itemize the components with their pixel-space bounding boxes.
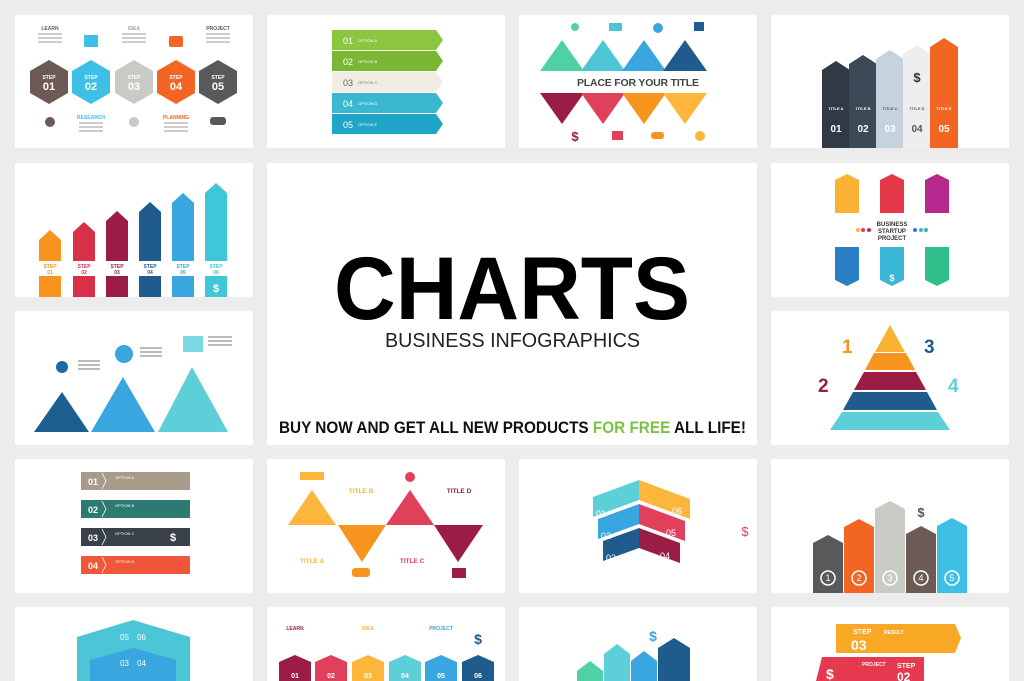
heading: CHARTS: CHARTS	[334, 238, 690, 338]
panel: option stripes: 01	[343, 36, 353, 46]
panel: title columns 01-05: $	[913, 70, 921, 85]
panel: option stripes: OPTION A	[358, 38, 377, 43]
panel: numbered arrow columns: $	[917, 505, 925, 520]
panel: bottom step hexagons: 03	[364, 673, 372, 680]
panel: title columns 01-05: TITLE C	[882, 106, 898, 111]
panel: title columns 01-05: TITLE E	[937, 106, 952, 111]
panel: rising step arrows: STEP	[209, 264, 223, 270]
panel: hexagon steps: 02	[85, 81, 97, 93]
panel: chevrons 01-06: 03	[606, 553, 616, 563]
panel: business startup project: STARTUP	[878, 229, 906, 235]
panel: bottom house shape: 04	[137, 659, 146, 668]
panel: rising step arrows: STEP	[43, 264, 57, 270]
panel: business startup project: BUSINESS	[877, 222, 907, 228]
panel: hexagon steps: STEP	[127, 75, 141, 81]
panel: bottom house shape: 06	[137, 633, 146, 642]
panel: rising step arrows: 03	[114, 270, 120, 276]
call to action: BUY NOW AND GET ALL NEW PRODUCTS FOR FREE ALL LIFE!	[279, 419, 746, 437]
panel: title columns 01-05: 05	[938, 124, 950, 135]
panel: bottom step hexagons	[267, 607, 505, 681]
panel: title columns 01-05: 04	[911, 124, 923, 135]
title text: PLACE FOR YOUR TITLE	[577, 77, 699, 89]
panel: hexagon steps: 01	[43, 81, 55, 93]
panel: chevrons 01-06: 05	[666, 528, 676, 538]
panel: numbered arrow columns: 1	[825, 573, 831, 583]
panel: pyramid: 1	[842, 337, 853, 358]
panel: bottom arrows: $	[649, 628, 657, 644]
panel: bottom house shape: 03	[120, 659, 129, 668]
panel: hexagon steps: PROJECT	[206, 26, 230, 32]
panel: zigzag triangles: TITLE C	[400, 558, 425, 565]
panel: option stripes: 03	[343, 78, 353, 88]
panel: option ribbons: OPTION B	[115, 503, 134, 508]
panel: hexagon steps: RESEARCH	[77, 115, 105, 121]
panel: zigzag triangles: TITLE A	[300, 558, 324, 565]
panel: numbered arrow columns	[771, 459, 1009, 593]
panel: bottom step ribbons: STEP	[853, 629, 872, 636]
panel: numbered arrow columns: 4	[918, 573, 924, 583]
panel: bottom step ribbons: PROJECT	[862, 662, 886, 668]
panel: chevrons 01-06: 01	[596, 509, 606, 519]
panel: option stripes: OPTION E	[358, 122, 377, 127]
panel: hexagon steps: STEP	[211, 75, 225, 81]
panel: rising step arrows: 05	[180, 270, 186, 276]
panel: pyramid: 2	[818, 376, 829, 397]
panel: bottom step hexagons: 02	[327, 673, 335, 680]
panel: option ribbons: OPTION C	[115, 531, 134, 536]
panel: chevrons 01-06: 02	[601, 531, 611, 541]
panel: rising step arrows: STEP	[143, 264, 157, 270]
panel: place for your title triangles: $	[571, 129, 579, 144]
panel: numbered arrow columns: 5	[949, 573, 955, 583]
panel: zigzag triangles	[267, 459, 505, 593]
panel: business startup project	[771, 163, 1009, 297]
panel: pyramid: 3	[924, 337, 935, 358]
panel: title columns 01-05: TITLE B	[855, 106, 871, 111]
panel: option ribbons: 02	[88, 505, 98, 515]
panel: bottom step ribbons: 03	[851, 637, 867, 653]
panel: rising step arrows: 01	[47, 270, 53, 276]
panel: title columns 01-05: 01	[830, 124, 842, 135]
panel: option stripes: OPTION C	[358, 80, 377, 85]
subheading: BUSINESS INFOGRAPHICS	[385, 330, 640, 352]
panel: hexagon steps: STEP	[42, 75, 56, 81]
panel: center title	[267, 163, 757, 445]
panel: rising step arrows	[15, 163, 253, 297]
panel: bottom step ribbons	[771, 607, 1009, 681]
panel: option stripes	[267, 15, 505, 148]
panel: pyramid	[771, 311, 1009, 445]
panel: rising step arrows: STEP	[176, 264, 190, 270]
panel: hexagon steps	[15, 15, 253, 148]
panel: rising step arrows: 02	[81, 270, 87, 276]
panel: chevrons 01-06: $	[741, 524, 749, 539]
panel: hexagon steps: STEP	[169, 75, 183, 81]
panel: zigzag triangles: TITLE B	[349, 488, 374, 495]
panel: title columns 01-05: TITLE D	[909, 106, 925, 111]
panel: title columns 01-05: 03	[884, 124, 896, 135]
panel: hexagon steps: 03	[128, 81, 140, 93]
panel: bottom step hexagons: LEARN	[286, 626, 304, 632]
panel: numbered arrow columns: 3	[887, 573, 893, 583]
panel: bottom step ribbons: RESULT	[884, 630, 904, 636]
panel: option ribbons: OPTION A	[115, 475, 134, 480]
panel: bottom step hexagons: 05	[437, 673, 445, 680]
panel: bottom step hexagons: 01	[291, 673, 299, 680]
panel: title columns 01-05: 02	[857, 124, 869, 135]
panel: mountains	[15, 311, 253, 445]
panel: hexagon steps: STEP	[84, 75, 98, 81]
panel: rising step arrows: 06	[213, 270, 219, 276]
panel: bottom step hexagons: IDEA	[362, 626, 374, 632]
panel: bottom step hexagons: $	[474, 631, 482, 647]
panel: bottom step hexagons: PROJECT	[429, 626, 453, 632]
panel: rising step arrows: $	[213, 283, 219, 295]
panel: bottom arrows	[519, 607, 757, 681]
panel: bottom step hexagons: 06	[474, 673, 482, 680]
panel: bottom step ribbons: STEP	[897, 663, 916, 670]
panel: title columns 01-05: TITLE A	[829, 106, 844, 111]
panel: option stripes: 05	[343, 120, 353, 130]
panel: chevrons 01-06: 04	[660, 551, 670, 561]
panel: pyramid: 4	[948, 376, 959, 397]
panel: option ribbons	[15, 459, 253, 593]
panel: option stripes: OPTION B	[358, 59, 377, 64]
panel: option stripes: OPTION D	[358, 101, 377, 106]
panel: hexagon steps: 05	[212, 81, 224, 93]
panel: hexagon steps: IDEA	[128, 26, 140, 32]
panel: option ribbons: 01	[88, 477, 98, 487]
panel: option ribbons: $	[170, 532, 176, 544]
panel: chevrons 01-06: 06	[672, 506, 682, 516]
panel: hexagon steps: PLANNING	[163, 115, 189, 121]
panel: option stripes: 04	[343, 99, 353, 109]
panel: hexagon steps: LEARN	[41, 26, 59, 32]
panel: rising step arrows: 04	[147, 270, 153, 276]
panel: hexagon steps: 04	[170, 81, 183, 93]
panel: bottom step hexagons: 04	[401, 673, 409, 680]
panel: zigzag triangles: TITLE D	[447, 488, 472, 495]
panel: place for your title triangles	[519, 15, 757, 148]
panel: business startup project: $	[889, 273, 895, 283]
panel: business startup project: PROJECT	[878, 236, 907, 242]
panel: bottom house shape: 05	[120, 633, 129, 642]
panel: option ribbons: 03	[88, 533, 98, 543]
panel: numbered arrow columns: 2	[856, 573, 862, 583]
panel: option ribbons: 04	[88, 561, 98, 571]
panel: bottom house shape	[15, 607, 253, 681]
panel: title columns 01-05	[771, 15, 1009, 148]
panel: option ribbons: OPTION D	[115, 559, 134, 564]
panel: chevrons 01-06	[519, 459, 757, 593]
panel: rising step arrows: STEP	[77, 264, 91, 270]
panel: option stripes: 02	[343, 57, 353, 67]
panel: rising step arrows: STEP	[110, 264, 124, 270]
